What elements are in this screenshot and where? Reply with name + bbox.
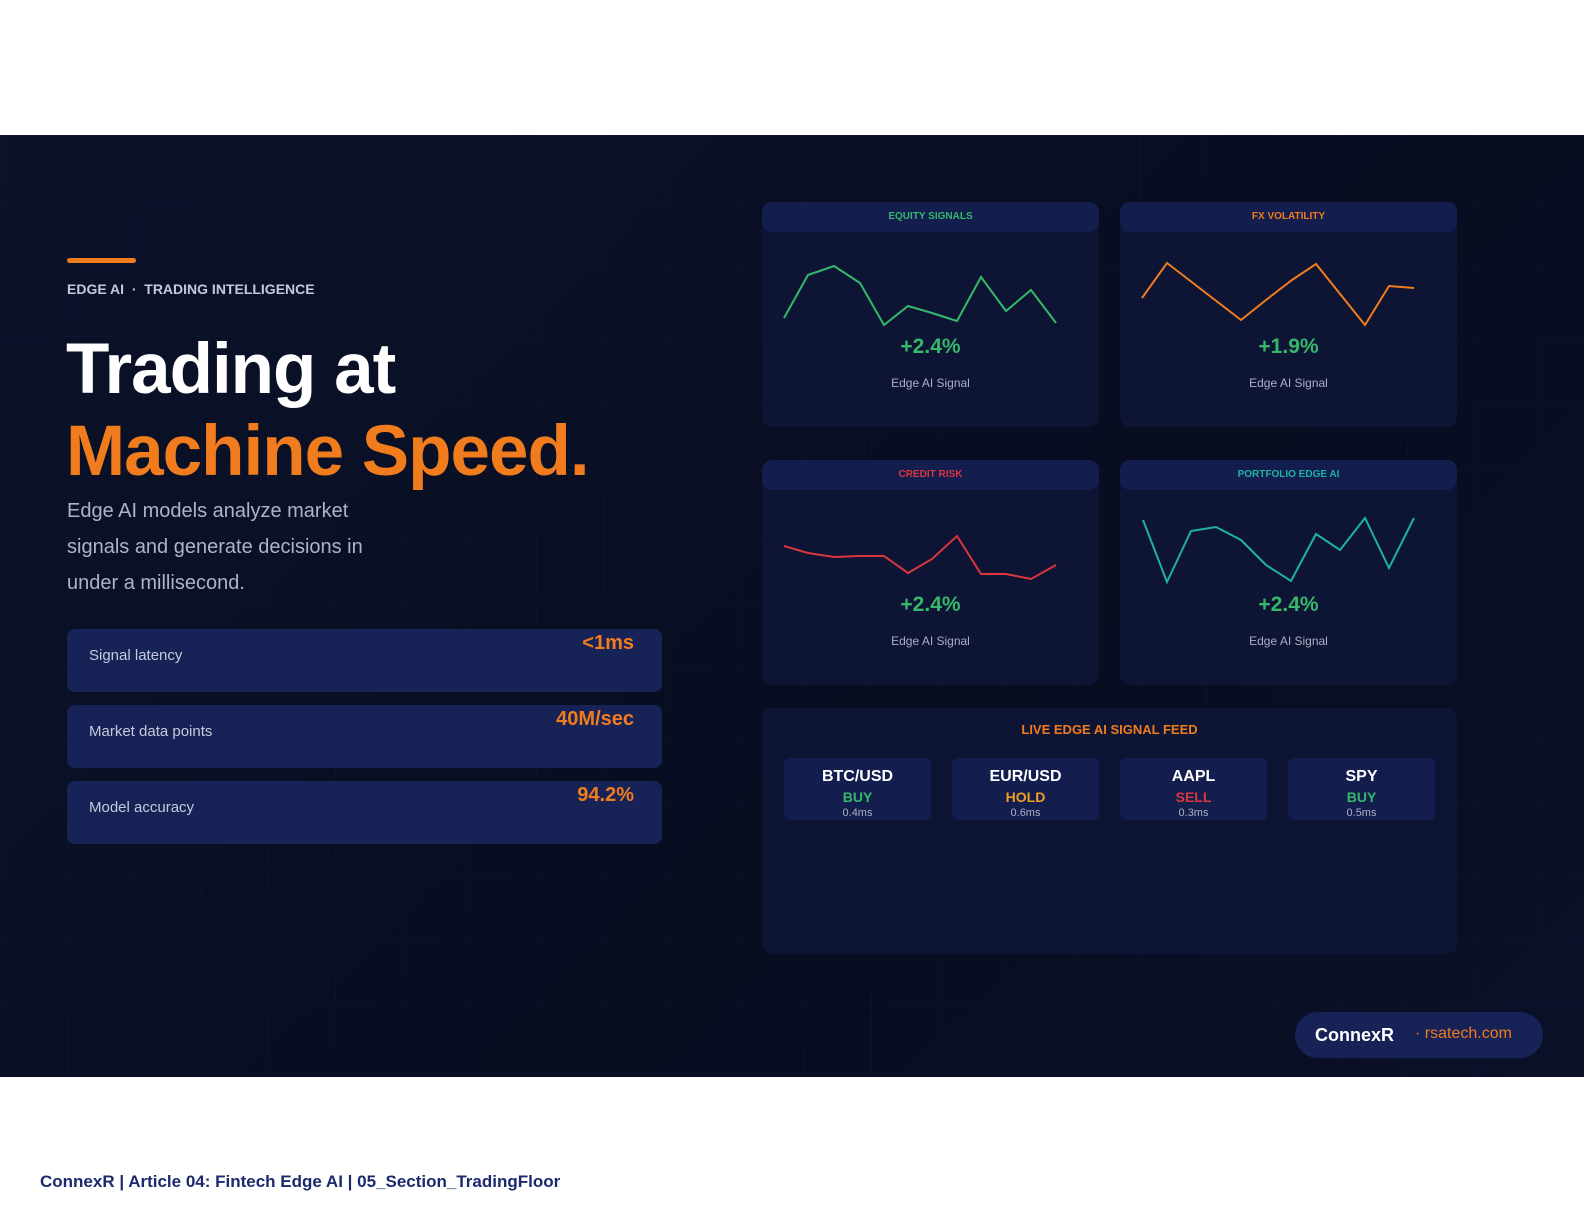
stat: market data points: 40M/sec [556, 708, 634, 730]
ticker: EUR/USD: HOLD [1006, 789, 1045, 805]
stat: model accuracy: Model accuracy [89, 799, 194, 816]
dark stage background [0, 135, 1584, 1077]
brand badge: ConnexR [1315, 1025, 1394, 1045]
panel: equity signals: Edge AI Signal [891, 376, 970, 390]
eyebrow label: EDGE AI · TRADING INTELLIGENCE [67, 281, 315, 297]
ticker: AAPL [1120, 758, 1267, 820]
ticker: SPY: SPY [1345, 768, 1378, 785]
ticker: SPY [1288, 758, 1435, 820]
title: Trading at [66, 330, 395, 409]
feed heading: LIVE EDGE AI SIGNAL FEED [1021, 722, 1198, 737]
panel: fx volatility [1120, 202, 1457, 427]
panel: fx volatility: FX VOLATILITY [1252, 211, 1325, 222]
ticker: BTC/USD: BUY [843, 789, 872, 805]
accent bar [67, 258, 136, 263]
stat: market data points: Market data points [89, 723, 212, 740]
panel: portfolio edge ai: PORTFOLIO EDGE AI [1238, 469, 1339, 480]
panel: fx volatility: Edge AI Signal [1249, 376, 1328, 390]
panel: credit risk: CREDIT RISK [899, 469, 962, 480]
panel: portfolio edge ai: Edge AI Signal [1249, 634, 1328, 648]
stat: signal latency: <1ms [582, 632, 634, 654]
ticker: EUR/USD [952, 758, 1099, 820]
stat: signal latency: Signal latency [89, 647, 182, 664]
panel: live signal feed [762, 708, 1457, 954]
ticker: AAPL: 0.3ms [1179, 807, 1208, 819]
panel: equity signals: +2.4% [900, 335, 961, 358]
ticker: EUR/USD: 0.6ms [1011, 807, 1040, 819]
stat: market data points [67, 705, 662, 768]
brand badge: · rsatech.com [1415, 1025, 1512, 1042]
panel: credit risk: Edge AI Signal [891, 634, 970, 648]
panel: portfolio edge ai: +2.4% [1258, 593, 1319, 616]
ticker: SPY: 0.5ms [1347, 807, 1376, 819]
ticker: AAPL: SELL [1176, 789, 1211, 805]
brand badge [1295, 1012, 1543, 1058]
panel: fx volatility: +1.9% [1258, 335, 1319, 358]
panel: equity signals: EQUITY SIGNALS [888, 211, 973, 222]
panel: equity signals [762, 202, 1099, 427]
panel: credit risk: +2.4% [900, 593, 961, 616]
ticker: BTC/USD: 0.4ms [843, 807, 872, 819]
panel: portfolio edge ai [1120, 460, 1457, 685]
ticker: AAPL: AAPL [1172, 768, 1215, 785]
stat: model accuracy [67, 781, 662, 844]
ticker: EUR/USD: EUR/USD [989, 768, 1062, 785]
footer caption: ConnexR | Article 04: Fintech Edge AI | 05_Section_TradingFloor [40, 1172, 560, 1191]
title: Machine Speed. [66, 412, 589, 491]
ticker: SPY: BUY [1347, 789, 1376, 805]
description: Edge AI models analyze market signals and generate decisions in under a millisecond. [67, 500, 363, 594]
ticker: BTC/USD: BTC/USD [822, 768, 893, 785]
title [66, 330, 589, 491]
stat: signal latency [67, 629, 662, 692]
panel: credit risk [762, 460, 1099, 685]
ticker: BTC/USD [784, 758, 931, 820]
stat: model accuracy: 94.2% [577, 784, 634, 806]
